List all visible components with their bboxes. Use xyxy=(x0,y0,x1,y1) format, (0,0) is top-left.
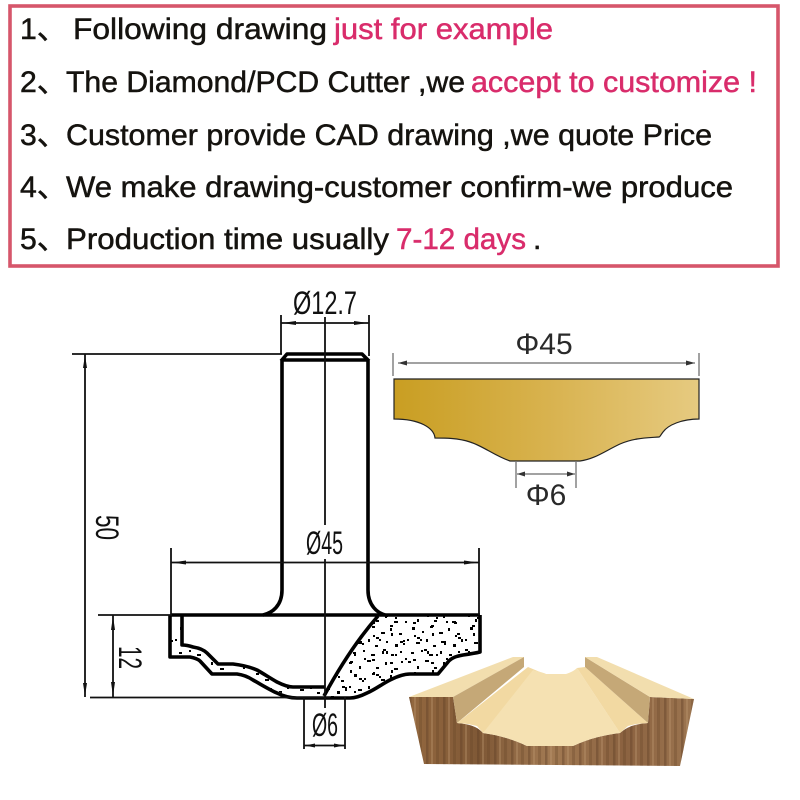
note 2: accept to customize ! xyxy=(471,66,757,99)
dimension: height 12: 12 xyxy=(112,646,148,669)
cutter top edge xyxy=(171,613,480,617)
dimension line: 45 xyxy=(393,328,699,376)
cutter outline xyxy=(170,615,480,698)
note 3: 3、 xyxy=(20,119,67,152)
note 2: 2、 xyxy=(20,66,67,99)
right wall xyxy=(585,657,650,723)
centre line xyxy=(324,317,326,708)
note 1: just for example xyxy=(333,13,553,46)
note 5: Production time usually xyxy=(66,223,389,256)
shank xyxy=(263,354,385,615)
dimension: diameter 12.7: Ø12.7 xyxy=(293,285,357,321)
left top face xyxy=(409,657,524,697)
note 4: 4、 xyxy=(20,171,67,204)
dimension: diameter 45: Ø45 xyxy=(306,525,343,561)
right top face xyxy=(585,657,694,699)
dimension: diameter 6 xyxy=(304,697,345,749)
note 2: The Diamond/PCD Cutter ,we xyxy=(66,66,465,99)
dimension line: 45: Φ45 xyxy=(515,328,573,361)
left ridge xyxy=(457,667,540,733)
carbide diagonal edge xyxy=(324,616,378,696)
cutter inner profile xyxy=(182,615,325,687)
dimension line: 6 xyxy=(516,462,576,512)
panel: notes box xyxy=(10,6,778,266)
note 5 xyxy=(20,223,541,256)
dimension: diameter 45 xyxy=(171,525,479,615)
reference lines xyxy=(72,354,330,698)
wood front face xyxy=(409,697,694,766)
note 5: . xyxy=(533,223,541,256)
dimension line: 6: Φ6 xyxy=(526,479,566,512)
wood moulding sample xyxy=(409,657,694,766)
right ridge xyxy=(577,667,648,733)
note 5: 7-12 days xyxy=(396,223,526,256)
dimension: height 50: 50 xyxy=(89,515,125,540)
left wall xyxy=(453,657,524,723)
note 4: We make drawing-customer confirm-we produce xyxy=(66,171,733,204)
note 1: 1、 xyxy=(20,13,67,46)
dimension: height 12 xyxy=(111,615,148,697)
note 5: 5、 xyxy=(20,223,67,256)
technical drawing: router bit xyxy=(72,285,480,749)
centre cove xyxy=(483,668,620,746)
note 2 xyxy=(20,66,757,99)
dimension: height 50 xyxy=(83,354,125,697)
dimension: diameter 6: Ø6 xyxy=(312,707,338,743)
gold cutter profile xyxy=(393,328,699,512)
dimension: diameter 12.7 xyxy=(281,285,369,356)
notes box border xyxy=(10,6,778,266)
carbide tip speckle fill xyxy=(170,616,480,698)
note 1: Following drawing xyxy=(73,13,327,46)
note 1 xyxy=(20,13,553,46)
gold profile shape xyxy=(394,379,699,461)
note 3: Customer provide CAD drawing ,we quote Price xyxy=(66,119,712,152)
